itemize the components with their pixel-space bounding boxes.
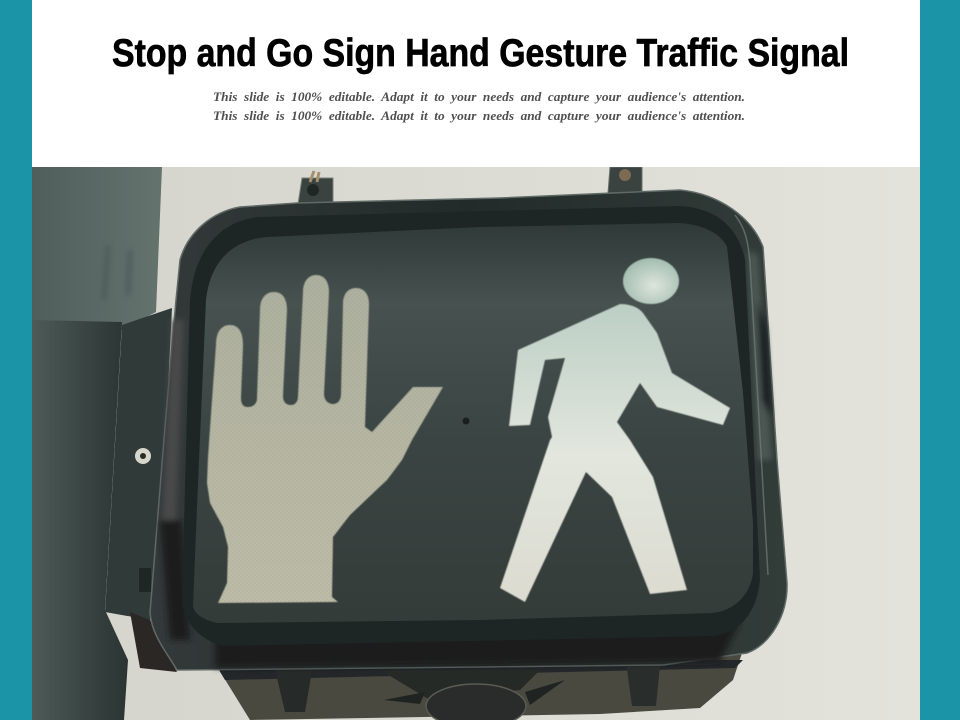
photo: pedestrian signal	[32, 167, 920, 720]
icon: stop hand	[207, 275, 443, 603]
mottled rim	[160, 250, 772, 668]
icon: walking person	[500, 258, 730, 602]
subtitle text: This slide is 100% editable. Adapt it to your needs and capture your audience's attention.	[213, 90, 745, 104]
housing tabs	[274, 167, 661, 712]
bracket on pole	[105, 308, 177, 672]
pole	[32, 167, 162, 720]
wall background	[32, 167, 920, 720]
subtitle text: This slide is 100% editable. Adapt it to your needs and capture your audience's attention.	[213, 109, 745, 123]
left teal sidebar	[0, 0, 32, 720]
lower housing with lens	[213, 650, 743, 720]
screw in face	[462, 418, 470, 424]
housing outer shell	[150, 190, 787, 670]
inner lip highlight	[735, 215, 768, 575]
walking person head	[623, 258, 679, 304]
right teal sidebar	[920, 0, 960, 720]
recessed inner frame	[182, 206, 760, 646]
signal face	[193, 223, 753, 623]
subtitle text	[213, 90, 745, 123]
walking person body	[500, 304, 730, 602]
